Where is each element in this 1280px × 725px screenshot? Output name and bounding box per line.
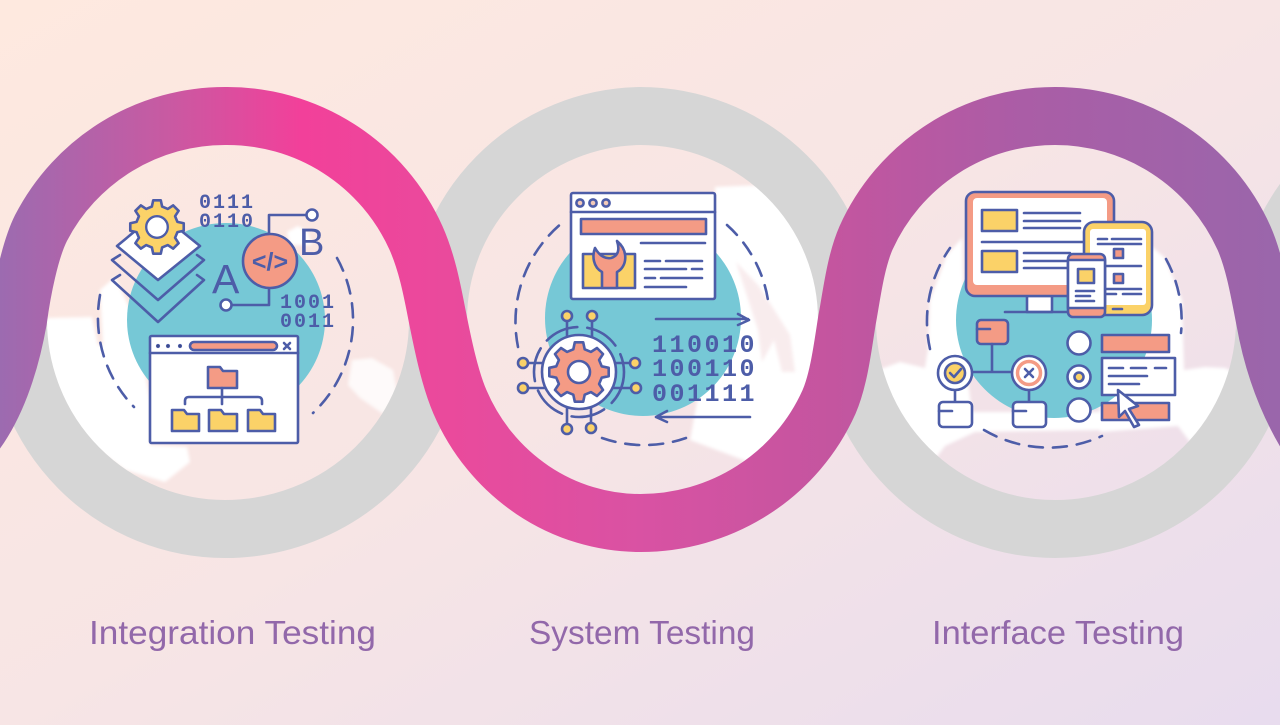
label: interface testing: Interface Testing xyxy=(932,614,1184,651)
binary block xyxy=(652,331,757,409)
binary bottom xyxy=(280,292,336,334)
icon: interface testing xyxy=(927,192,1182,448)
letter B: B xyxy=(299,222,324,264)
teal circle 1 xyxy=(127,223,325,417)
dashed orbit xyxy=(515,223,769,445)
form bars xyxy=(1102,335,1175,420)
connector ends xyxy=(220,210,318,310)
binary bottom: 1001 xyxy=(280,292,336,315)
gear xyxy=(130,200,184,254)
connector lines xyxy=(232,215,306,305)
icon: system testing xyxy=(515,193,769,445)
layers xyxy=(112,212,204,322)
dashed orbit xyxy=(927,248,1182,448)
gray ribbon xyxy=(18,116,1280,529)
cursor xyxy=(1118,390,1139,427)
map streaks xyxy=(736,262,795,372)
monitor xyxy=(966,192,1114,312)
bottom arrow xyxy=(656,411,750,422)
binary top: 0110 xyxy=(199,211,255,234)
code circle xyxy=(243,234,297,288)
white map patches xyxy=(40,184,1240,482)
binary top: 0111 xyxy=(199,192,255,215)
icon: integration testing xyxy=(98,192,353,443)
label: integration testing: Integration Testing xyxy=(89,614,376,651)
gear chip xyxy=(518,311,641,434)
binary top xyxy=(199,192,255,234)
letter A: A xyxy=(212,256,240,302)
binary block: 100110 xyxy=(652,355,757,384)
code circle: </> xyxy=(252,248,288,276)
binary block: 110010 xyxy=(652,331,757,360)
label: system testing: System Testing xyxy=(529,614,755,651)
browser window xyxy=(150,336,298,443)
colored ribbon xyxy=(0,116,1280,523)
radio options xyxy=(1068,332,1090,422)
teal circle 3 xyxy=(956,222,1152,418)
phone xyxy=(1068,254,1105,317)
binary bottom: 0011 xyxy=(280,311,336,334)
tablet xyxy=(1084,222,1152,315)
teal circle 2 xyxy=(545,220,741,416)
binary block: 001111 xyxy=(652,380,757,409)
top arrow xyxy=(656,314,749,325)
flow diagram xyxy=(938,320,1046,427)
browser window xyxy=(571,193,715,299)
dashed orbit xyxy=(98,258,353,413)
